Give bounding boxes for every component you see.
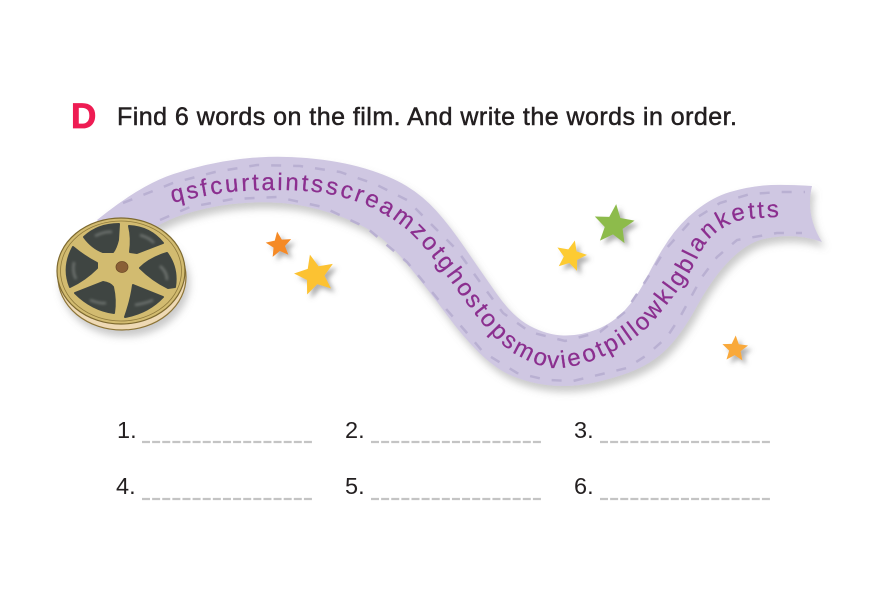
reel body and shadow [58, 224, 186, 330]
answer 1: 1. [117, 417, 137, 443]
star: orange right [722, 335, 749, 361]
instruction heading: Find 6 words on the film. And write the words in order. [117, 103, 737, 131]
reel inner rim [60, 221, 182, 321]
star: green [592, 202, 636, 244]
reel windows [67, 224, 176, 317]
star: small orange [264, 230, 293, 258]
icon: film reel [57, 218, 186, 330]
star: large yellow [291, 250, 338, 296]
answer 3: 3. [574, 417, 594, 443]
answer 6: 6. [574, 473, 594, 499]
top perforation dashes [123, 165, 805, 341]
section letter D: D [71, 97, 96, 136]
answer 5: 5. [345, 473, 365, 499]
bottom perforation dashes [160, 197, 802, 381]
film highlights in windows [73, 232, 167, 305]
reel gold face [57, 218, 185, 324]
answer 2: 2. [345, 417, 365, 443]
film ribbon [97, 156, 826, 396]
answer 4: 4. [116, 473, 136, 499]
ribbon band [97, 157, 822, 386]
reel hub [116, 262, 128, 272]
star: yellow right [553, 237, 590, 272]
hidden word letter string: qsfcurtaintsscreamzotghostopsmovieotpillowklgblanketts [172, 172, 778, 368]
